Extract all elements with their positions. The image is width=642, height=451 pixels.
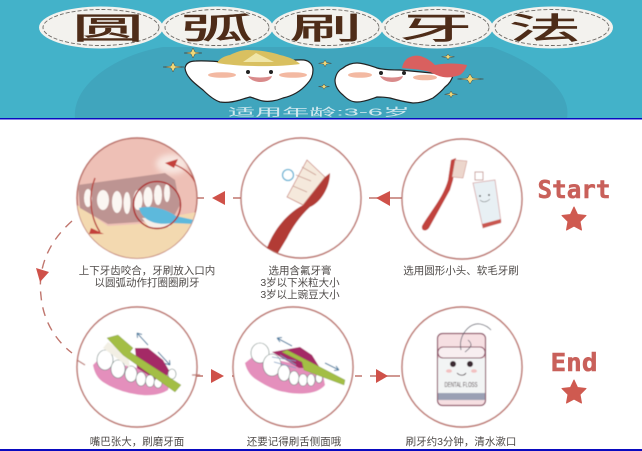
caption: 还要记得刷舌侧面哦 (247, 435, 342, 448)
panel: step 2 fluoride toothpaste (241, 138, 361, 301)
title: 刷 (290, 12, 362, 46)
arrow: step 5 to step 6 (355, 369, 415, 383)
icon: dental floss box (402, 307, 522, 427)
panel: step 3 small soft brush (402, 139, 522, 277)
label: Start: Start (538, 175, 610, 204)
icon: brush with paste (241, 138, 361, 258)
panel: step 4 brush chewing surfaces (77, 307, 200, 448)
caption: 刷牙约3分钟，清水漱口 (406, 435, 516, 448)
title: 弧 (181, 12, 253, 46)
header banner (0, 0, 642, 118)
label: End (550, 348, 598, 403)
icon: lower teeth with brush inside (233, 307, 353, 427)
panel: step 6 rinse and floss (402, 307, 522, 448)
arrow: step 2 to step 1 (197, 191, 241, 205)
icon: star (562, 207, 586, 230)
caption: 以圆弧动作打圈圈刷牙 (94, 276, 200, 289)
title: 牙 (400, 12, 472, 46)
subtitle: applicable age: 适用年龄:3-6岁 (228, 106, 410, 118)
caption: 3岁以上豌豆大小 (260, 288, 340, 301)
icon: lower teeth with green brush (77, 307, 200, 427)
arrow: step 3 to step 2 (369, 191, 402, 206)
arrow: step 4 to step 5 (193, 369, 236, 383)
icon: mouth with brush (77, 138, 197, 260)
icon: girl tooth with bow (335, 56, 467, 103)
icon: sparkles (163, 48, 484, 98)
caption: 选用含氟牙膏 (268, 264, 332, 277)
icon: boy tooth with hat (185, 50, 313, 102)
icon: star (562, 380, 586, 403)
title: 法 (509, 12, 581, 46)
flow arrows (36, 191, 415, 383)
arrow: step 1 to step 4 curved (36, 221, 72, 353)
darker background hill (75, 47, 567, 118)
caption: 选用圆形小头、软毛牙刷 (403, 264, 519, 277)
panel: step 5 brush tongue side (233, 307, 353, 448)
label: Start (538, 175, 610, 230)
icon: toothbrush and tube (402, 139, 522, 259)
panel: step 1 circular brushing (77, 138, 215, 289)
label: End: End (550, 348, 598, 377)
caption: 上下牙齿咬合，牙刷放入口内 (79, 264, 215, 277)
title (72, 12, 581, 46)
header divider (0, 118, 642, 120)
caption: 3岁以下米粒大小 (260, 276, 340, 289)
footer divider (0, 449, 642, 451)
title: 圆 (72, 12, 144, 46)
title badges (39, 6, 613, 48)
caption: 嘴巴张大，刷磨牙面 (90, 435, 184, 448)
icon: dental floss box: DENTAL FLOSS (444, 382, 478, 389)
